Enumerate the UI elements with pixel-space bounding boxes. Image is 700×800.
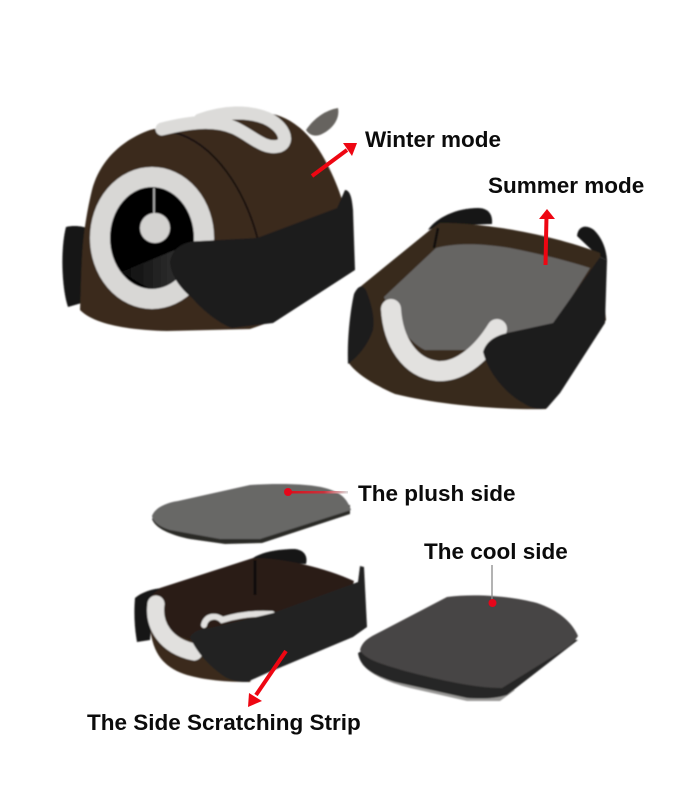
white plush U strip (391, 309, 497, 371)
brown tray base (150, 600, 280, 682)
pad dark edge (358, 630, 578, 699)
label: side scratching strip: The Side Scratching Strip (87, 710, 361, 735)
plush side pad (152, 484, 351, 544)
product: summer mode bed (348, 208, 607, 409)
white plush top strip (162, 113, 285, 147)
icon: grey ear at back of dome (306, 108, 338, 136)
arrow: side scratching strip (248, 651, 286, 707)
white plush door ring (100, 177, 204, 299)
tray seams (362, 228, 438, 300)
pad light underside (362, 660, 515, 701)
right corner flap (577, 227, 607, 260)
cool side pad (358, 595, 578, 701)
hanging toy string (153, 188, 155, 216)
white plush strip (156, 604, 194, 652)
left corner flap (348, 287, 374, 364)
label: cool side: The cool side (424, 539, 568, 564)
hanging toy ball (140, 213, 170, 243)
label: plush side: The plush side (358, 481, 516, 506)
pad top surface (360, 595, 578, 688)
pointer: cool side (488, 565, 496, 607)
left corner flap (134, 588, 162, 642)
far white plush strip (204, 614, 272, 625)
back corner flap (253, 549, 307, 564)
dark doorway (106, 182, 198, 294)
brown tray interior (150, 558, 354, 640)
product: open bed with scratching strip (134, 549, 367, 682)
brown dome (80, 112, 350, 331)
dark scratching strip (170, 190, 355, 328)
dark scratching strip (483, 257, 607, 409)
pad top surface (152, 484, 351, 539)
doorway floor (122, 250, 192, 295)
left side flap (62, 226, 92, 307)
pad edge (152, 505, 350, 544)
grey cushion (384, 244, 590, 350)
inner seam (254, 560, 256, 595)
label: winter mode: Winter mode (365, 127, 501, 152)
pointer: plush side (284, 488, 348, 496)
product: winter mode bed (62, 108, 355, 331)
arrow: summer mode (539, 209, 555, 265)
dark scratching strip (190, 566, 367, 682)
back corner flap (428, 208, 492, 230)
dome seam (173, 132, 258, 240)
label: summer mode: Summer mode (488, 173, 644, 198)
arrow: winter mode (312, 143, 357, 176)
brown tray (348, 223, 606, 409)
